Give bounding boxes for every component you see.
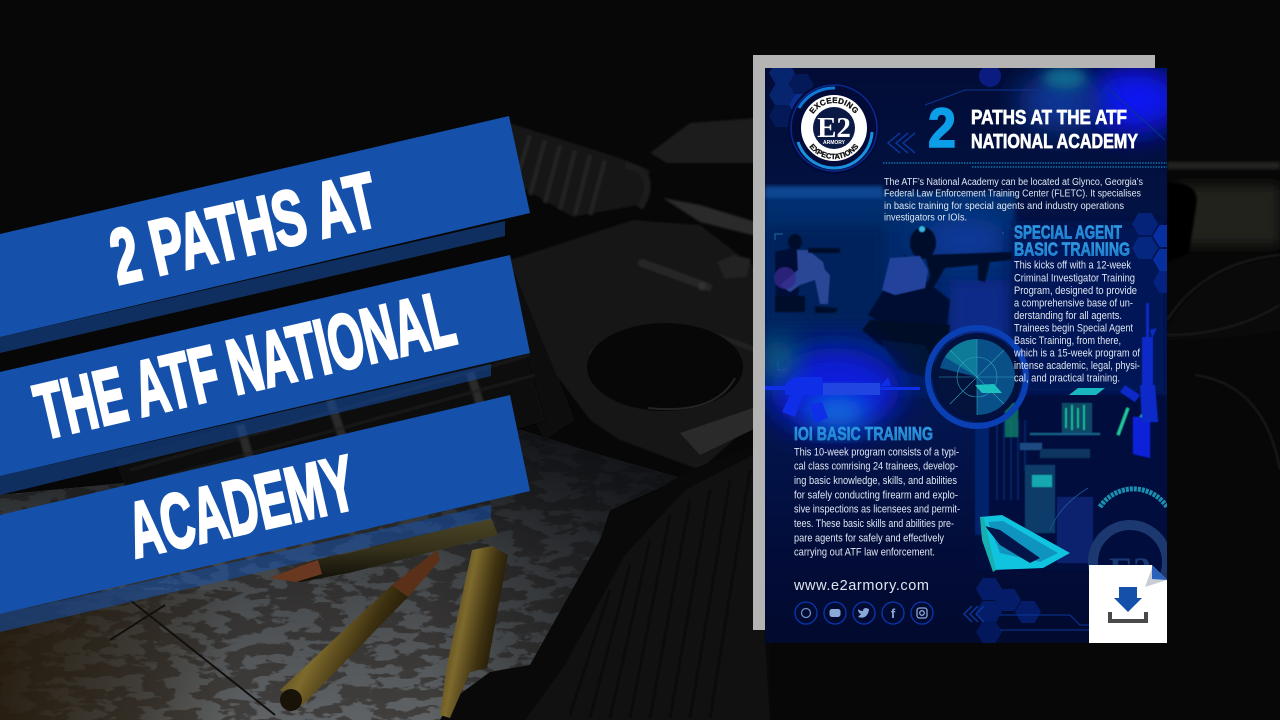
body: IOI: tees. These basic skills and abilities pre- — [794, 518, 954, 530]
icon: whatsapp — [795, 602, 817, 624]
body: IOI: This 10-week program consists of a typi- — [794, 446, 959, 458]
body: IOI — [794, 446, 960, 558]
icon: facebook: f — [891, 606, 896, 621]
body: IOI: cal class comrising 24 trainees, develop- — [794, 460, 958, 472]
kneeling trainee — [774, 234, 840, 313]
intro text: The ATF’s National Academy can be located at Glynco, Georgia’s — [884, 177, 1143, 188]
body: special agent: Criminal Investigator Training — [1014, 272, 1135, 284]
poster photo: training scene — [765, 186, 1167, 397]
E2 Armory logo: E2 — [817, 112, 851, 144]
body: IOI: ing basic knowledge, skills, and abilities — [794, 475, 957, 487]
poster hexagon cluster top left — [769, 68, 814, 127]
poster heading — [929, 107, 1138, 148]
poster machinery room — [975, 303, 1167, 570]
pistol grip — [440, 440, 770, 720]
cyan table — [980, 515, 1070, 572]
E2 Armory logo — [788, 84, 878, 172]
banner: 2 paths at — [0, 116, 530, 337]
banner: academy — [0, 395, 530, 614]
body: IOI: for safely conducting firearm and explo- — [794, 490, 958, 502]
body: special agent: which is a 15-week program of — [1013, 348, 1140, 360]
body: special agent: Basic Training, from there, — [1014, 335, 1121, 347]
poster blue glow and rifle — [762, 338, 920, 432]
E2 Armory logo: EXPECTATIONS — [809, 143, 858, 160]
heading: special agent: BASIC TRAINING — [1014, 238, 1130, 260]
dotted divider lines — [883, 163, 1167, 167]
body: special agent — [1013, 260, 1140, 384]
icon: instagram — [911, 602, 933, 624]
grey backing panel — [753, 55, 1155, 630]
body: IOI: sive inspections as licensees and permit- — [794, 504, 960, 516]
poster heading: PATHS AT THE ATF — [971, 107, 1127, 129]
magazine — [115, 340, 545, 500]
icon: twitter — [853, 602, 875, 624]
poster — [765, 68, 1167, 643]
bullet: upright — [440, 546, 508, 718]
poster top glow — [925, 65, 1183, 140]
body: IOI: pare agents for safely and effectively — [794, 532, 945, 544]
website address: www.e2armory.com — [793, 578, 929, 594]
poster hexagon clusters — [976, 213, 1179, 643]
body: special agent: a comprehensive base of un- — [1014, 298, 1133, 310]
body: special agent: cal, and practical training. — [1014, 372, 1120, 384]
icon: horizontal rifle — [765, 377, 920, 423]
poster heading: 2 — [928, 96, 956, 159]
faded logo watermark: E2 — [1109, 550, 1151, 590]
standing trainee with rifle — [862, 226, 1012, 382]
body: special agent: This kicks off with a 12-week — [1014, 260, 1132, 272]
rifle handguard — [500, 123, 650, 217]
section: IOI basic training — [794, 423, 960, 558]
body: special agent: Program, designed to provide — [1014, 285, 1137, 297]
translucent banner shadows — [0, 221, 505, 632]
E2 Armory logo: ARMORY — [823, 140, 846, 146]
table surface — [0, 420, 700, 720]
bullet: front diagonal — [280, 550, 440, 711]
icon: vertical rifle — [1120, 303, 1158, 422]
chevrons — [888, 133, 1089, 630]
viewfinder corners — [775, 233, 1004, 370]
E2 Armory logo: EXCEEDING — [808, 97, 858, 114]
trigger guard opening — [587, 323, 756, 455]
icon: youtube — [824, 602, 846, 624]
bullets — [270, 518, 508, 718]
banner text line 3: ACADEMY — [119, 438, 363, 575]
heading: special agent: SPECIAL AGENT — [1014, 222, 1122, 242]
bullet: lying horizontally — [270, 518, 498, 582]
banner text line 1: 2 PATHS AT — [102, 155, 385, 301]
social icons — [795, 602, 933, 624]
heading: IOI: IOI BASIC TRAINING — [794, 423, 933, 444]
section: special agent basic training — [1013, 222, 1140, 384]
intro text: investigators or IOIs. — [884, 212, 967, 224]
intro text: Federal Law Enforcement Training Center (FLETC). It specialises — [884, 188, 1141, 200]
intro text: in basic training for special agents and industry operations — [884, 201, 1124, 212]
intro text — [884, 177, 1143, 224]
icon: download arrow — [1108, 587, 1148, 623]
body: special agent: Trainees begin Special Agent — [1014, 322, 1133, 334]
body: special agent: intense academic, legal, physi- — [1014, 360, 1140, 372]
download badge — [1089, 565, 1167, 643]
heading: special agent — [1014, 225, 1130, 256]
radar graphic — [928, 328, 1105, 426]
far right background shapes — [1167, 162, 1280, 470]
body: IOI: carrying out ATF law enforcement. — [794, 546, 935, 558]
poster heading: NATIONAL ACADEMY — [971, 131, 1139, 153]
rifle upper parts and receiver — [480, 118, 756, 470]
faded logo watermark — [1050, 486, 1167, 580]
page fold — [1145, 565, 1167, 587]
banner text line 2: THE ATF NATIONAL — [27, 274, 463, 456]
body: special agent: derstanding for all agents. — [1014, 310, 1122, 322]
banner: the ATF national — [0, 255, 530, 476]
